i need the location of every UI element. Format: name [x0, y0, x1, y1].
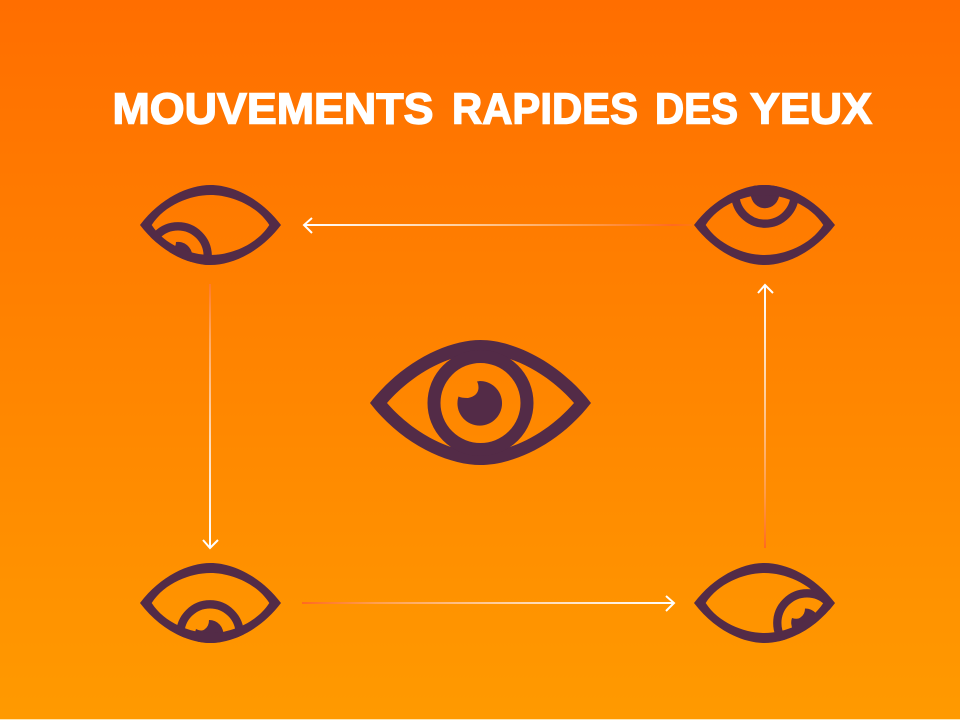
- title: DES: [655, 85, 738, 133]
- icon: eye looking bottom-right, bottom right: [694, 563, 835, 643]
- title: [112, 85, 872, 133]
- arrow: bottom left to bottom right: [302, 596, 674, 611]
- icon: eye looking bottom-left, top left: [140, 185, 281, 265]
- arrow: top left to bottom left: [203, 284, 218, 548]
- title: RAPIDES: [452, 85, 638, 133]
- title: YEUX: [750, 85, 872, 133]
- icon: central eye: [370, 340, 591, 465]
- arrow: top right to top left: [304, 218, 692, 233]
- arrow: bottom right to top right: [758, 285, 773, 548]
- icon: eye looking up, top right: [694, 185, 835, 265]
- icon: eye looking down, bottom left: [140, 563, 281, 643]
- title: MOUVEMENTS: [112, 85, 434, 133]
